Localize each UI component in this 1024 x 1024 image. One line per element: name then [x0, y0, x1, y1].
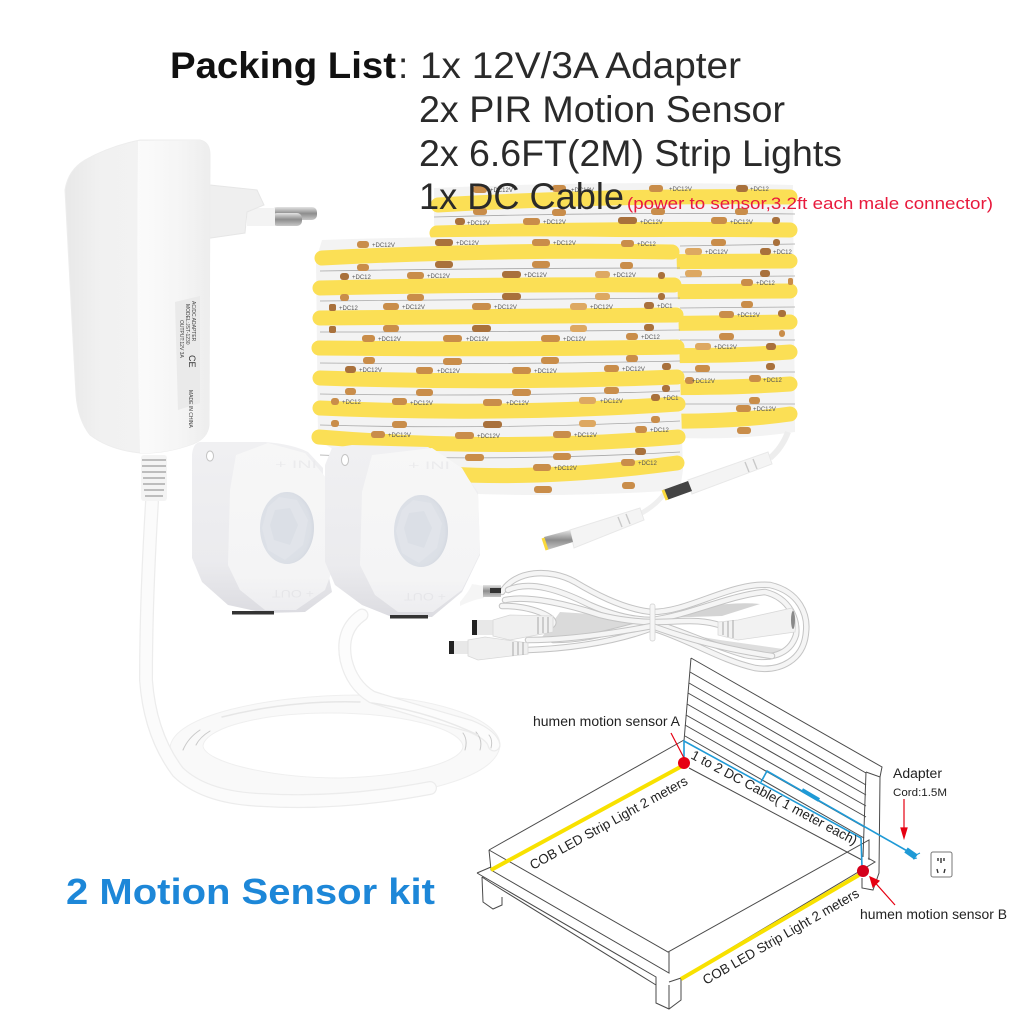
sensor plug [460, 584, 501, 606]
strip light reel: back coil: +DC12 [756, 281, 776, 287]
strip light reel: front coil: +DC12V [563, 337, 586, 343]
bed headboard [684, 658, 882, 890]
packing item: adapter: 1x 12V/3A Adapter [420, 45, 741, 86]
coil ring [170, 695, 500, 800]
strip light reel: front coil: +DC12V [524, 273, 547, 279]
wall socket icon [931, 852, 952, 877]
motion sensor 2 [325, 445, 480, 618]
strip light reel: back coil: +DC12V [705, 250, 728, 256]
strip light reel: back coil: +DC12V [467, 221, 490, 227]
cable loops [502, 573, 806, 669]
label sensor B: humen motion sensor B [860, 907, 1007, 922]
strip light reel: front coil: +DC12V [427, 274, 450, 280]
packing item: sensors: 2x PIR Motion Sensor [419, 89, 785, 130]
adapter label: OUTPUT:12V 3A [178, 320, 184, 358]
strip light reel: back coil: +DC12V [669, 187, 692, 193]
strip light reel: front coil: +DC12V [600, 399, 623, 405]
strip light reel: back coil: +DC12 [773, 250, 793, 256]
strip light reel: back coil: +DC12 [750, 187, 770, 193]
strip light reel: front coil: +DC12V [456, 241, 479, 247]
strip light reel: front coil: +DC12V [622, 367, 645, 373]
mount hole [206, 451, 214, 461]
male connector lower [449, 637, 528, 660]
strip light reel: front coil: +DC12V [554, 466, 577, 472]
top face [228, 443, 336, 610]
strip light reel: front coil: +DC1 [657, 304, 673, 310]
strip light reel: front coil: +DC12V [410, 401, 433, 407]
strip light reel: front coil: +DC12 [352, 275, 372, 281]
motion sensor 2: + INI [408, 460, 450, 472]
arrow to adapter cord [901, 799, 907, 838]
left cable [146, 502, 430, 801]
strip light reel: front coil: +DC12V [372, 243, 395, 249]
strip light reel: front coil: +DC12 [637, 242, 657, 248]
adapter label [175, 296, 200, 428]
PIR lens [394, 495, 448, 567]
12V adapter [65, 140, 317, 501]
strip light reel: front coil: +DC12 [650, 428, 670, 434]
top face [360, 448, 480, 612]
kit title: 2 Motion Sensor kit [66, 871, 435, 912]
adapter plug body [177, 185, 264, 240]
sensor B red dot [857, 865, 869, 877]
strip connector pigtails [543, 432, 788, 550]
strip light reel: front coil: +DC12V [477, 434, 500, 440]
strip light reel: front coil: +DC12 [342, 400, 362, 406]
female connector [718, 608, 796, 640]
packing item: DC cable: 1x DC Cable [419, 176, 624, 217]
mount hole [342, 454, 348, 466]
adapter label: CE [187, 355, 197, 368]
adapter strain relief [141, 455, 167, 501]
DC cable note: (power to sensor,3.2ft each male connector) [627, 194, 993, 213]
adapter housing [65, 140, 210, 453]
arrow to sensor A [671, 733, 684, 758]
strip light reel: front coil: +DC12V [574, 433, 597, 439]
strip light reel: back coil: +DC12V [714, 345, 737, 351]
strip light reel: back coil: +DC12V [543, 220, 566, 226]
strip light reel: front coil: +DC12V [466, 337, 489, 343]
adapter label: MODEL:JST-1230 [184, 304, 190, 345]
strip light reel: front coil: +DC12V [494, 305, 517, 311]
strip light reel: front coil: +DC12V [437, 369, 460, 375]
packing list colon: : [398, 45, 408, 86]
adapter front face [137, 140, 210, 453]
strip light reel: front coil: +DC12V [402, 305, 425, 311]
1 to 2 DC cable bundle [449, 573, 806, 669]
yellow LED strip A [491, 765, 684, 870]
yellow LED strip B [681, 875, 859, 979]
coil creases [183, 730, 492, 750]
strip light reel: front coil: +DC12V [534, 369, 557, 375]
strip light reel: front coil: +DC12V [553, 241, 576, 247]
adapter label: MADE IN CHINA [187, 390, 193, 428]
strip light reel: front coil: +DC12 [339, 306, 359, 312]
strip light reel: front coil: +DC12 [641, 335, 661, 341]
strip light reel: back coil: +DC12V [730, 220, 753, 226]
label DC cable: 1 to 2 DC Cable( 1 meter each) [689, 747, 860, 848]
strip light reel: back coil: +DC12V [571, 188, 594, 194]
sensor cable [345, 615, 494, 745]
label strip B: COB LED Strip Light 2 meters [700, 885, 862, 988]
label cord length: Cord:1.5M [893, 787, 947, 799]
foot [232, 611, 274, 614]
packing item: strips: 2x 6.6FT(2M) Strip Lights [419, 133, 842, 174]
strip light reel: front coil [316, 236, 683, 495]
strip light reel: front coil: +DC12V [590, 305, 613, 311]
strip light reel: back coil [434, 183, 795, 438]
print marks: + OUT [272, 587, 314, 599]
PIR lens [260, 492, 314, 564]
foot [390, 615, 428, 618]
strip light reel: front coil: +DC12 [638, 461, 658, 467]
motion sensor 1 [192, 442, 336, 614]
bed wiring diagram [477, 658, 1007, 1009]
strip light reel: front coil: +DC12V [359, 368, 382, 374]
blue cable wiring [684, 741, 920, 867]
print marks: + OUT [404, 590, 446, 602]
male connector upper [472, 615, 553, 640]
adapter plug pins [247, 207, 317, 226]
label strip A: COB LED Strip Light 2 meters [527, 773, 690, 873]
strip light reel: back coil: +DC12V [692, 379, 715, 385]
label sensor A: humen motion sensor A [533, 714, 680, 729]
strip light reel: front coil: +DC12V [378, 337, 401, 343]
label adapter: Adapter [893, 766, 943, 781]
strip light reel: back coil: +DC12V [490, 188, 513, 194]
packing list heading: Packing List [170, 45, 396, 86]
strip light reel: back coil: +DC12V [737, 313, 760, 319]
arrow to sensor B [870, 877, 895, 905]
strip light reel: front coil: +DC12V [613, 273, 636, 279]
adapter cable and coil [146, 502, 500, 801]
strip light reel: front coil: +DC1 [663, 396, 679, 402]
sensor A red dot [678, 757, 690, 769]
strip light reel: back coil: +DC12V [640, 220, 663, 226]
adapter label: AC/DC ADAPTER [190, 301, 196, 342]
bed mattress and frame [477, 740, 875, 1009]
motion sensor 1: + INI [275, 459, 317, 471]
strip light reel: back coil: +DC12 [763, 378, 783, 384]
strip light reel: back coil: +DC12V [753, 407, 776, 413]
strip light reel: front coil: +DC12V [388, 433, 411, 439]
strip light reel: front coil: +DC12V [506, 401, 529, 407]
